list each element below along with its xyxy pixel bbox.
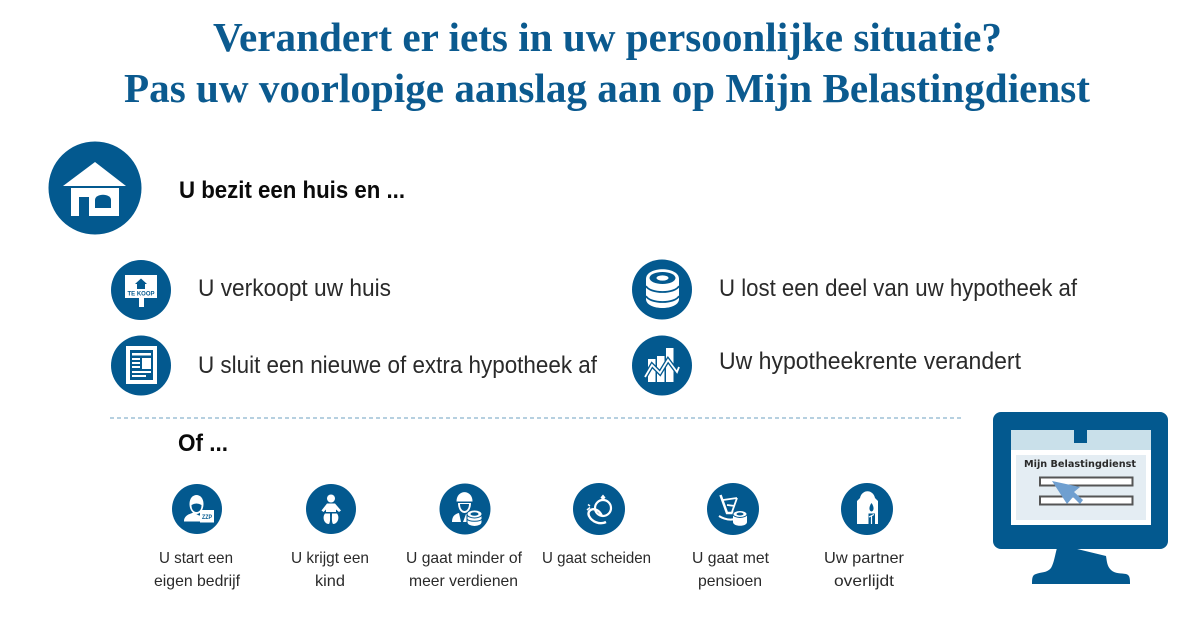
- heading: U bezit een huis: U bezit een huis en ...: [179, 177, 405, 204]
- item: eigen bedrijf: [154, 484, 241, 590]
- icon: baby: [306, 484, 356, 534]
- item: kind: U krijgt een: [291, 550, 369, 567]
- item: rente verandert: [632, 336, 1021, 396]
- icon: house: [48, 142, 142, 234]
- item: lost deel af: [632, 260, 1077, 320]
- heading: Of: Of ...: [178, 430, 228, 457]
- item: partner overlijdt: overlijdt: [834, 573, 895, 590]
- icon: person zzp: ZZP: [202, 515, 212, 521]
- item: verkoopt huis: [111, 260, 391, 320]
- item: lost deel af: U lost een deel van uw hypotheek af: [719, 275, 1077, 302]
- item: nieuwe hypotheek: U sluit een nieuwe of extra hypotheek af: [198, 352, 597, 379]
- item: partner overlijdt: Uw partner: [824, 550, 905, 567]
- item: verdienen: U gaat minder of: [406, 550, 523, 567]
- item: eigen bedrijf: eigen bedrijf: [154, 573, 241, 590]
- item: eigen bedrijf: U start een: [159, 550, 233, 567]
- item: rente verandert: Uw hypotheekrente verandert: [719, 348, 1021, 375]
- illustration: computer monitor: Mijn Belastingdienst: [1024, 459, 1136, 470]
- icon: rocking chair with coins: [707, 483, 759, 535]
- item: kind: [291, 484, 369, 590]
- item: verkoopt huis: U verkoopt uw huis: [198, 275, 391, 302]
- item: pensioen: [692, 483, 770, 590]
- item: verdienen: [406, 484, 523, 590]
- illustration: computer monitor: [993, 412, 1168, 584]
- icon: worker with coins: [440, 484, 490, 534]
- icon: cursor arrow: [1052, 481, 1083, 504]
- title: [124, 14, 1090, 111]
- item: pensioen: U gaat met: [692, 550, 770, 567]
- icon: broken rings: [573, 483, 625, 535]
- icon: te koop sign: TE KOOP: [128, 292, 154, 298]
- title: Pas uw voorlopige aanslag aan op Mijn Belastingdienst: [124, 65, 1090, 111]
- icon: coin stack: [632, 260, 692, 320]
- item: scheiden: [542, 483, 651, 567]
- icon: gravestone with candle: [841, 483, 893, 535]
- item: verdienen: meer verdienen: [409, 573, 518, 590]
- item: pensioen: pensioen: [698, 573, 762, 590]
- icon: bar chart with line: [632, 336, 692, 396]
- icon: document: [111, 336, 171, 396]
- item: partner overlijdt: [824, 483, 905, 590]
- item: nieuwe hypotheek: [111, 336, 597, 396]
- title: Verandert er iets in uw persoonlijke situatie?: [213, 14, 1002, 60]
- icon: te koop sign: [111, 260, 171, 320]
- item: scheiden: U gaat scheiden: [542, 550, 651, 567]
- item: kind: kind: [315, 573, 345, 590]
